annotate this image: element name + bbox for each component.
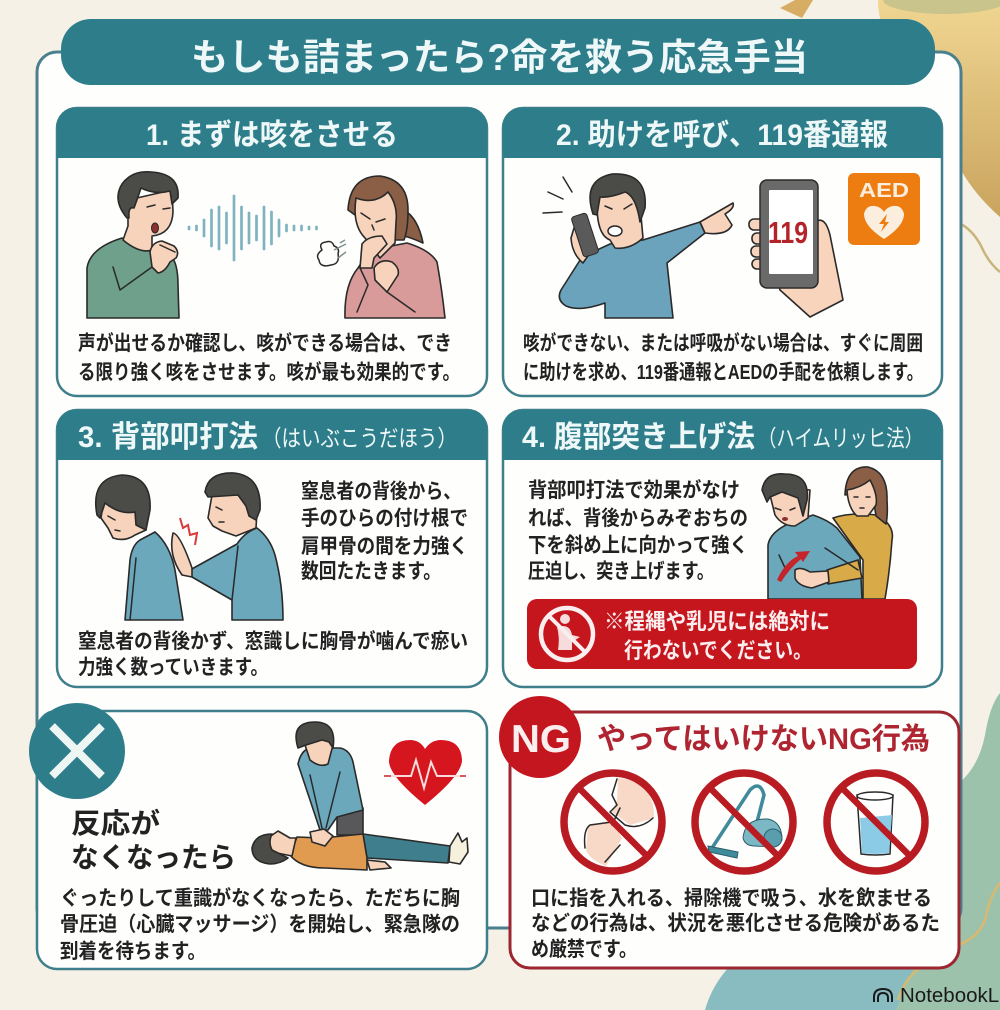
icon: no water [827,773,925,871]
NG badge [499,696,581,778]
warning box [527,599,917,669]
panel: step 1 cough [57,108,487,396]
unresponsive body text: ぐったりして重識がなくなったら、ただちに胸 [60,886,460,910]
step 4 text: 圧迫し、突き上げます。 [528,560,714,583]
step 4 heading [522,421,923,454]
step 2 body text [523,331,923,384]
unresponsive heading: なくなったら [71,842,236,873]
warning text: 行わないでください。 [624,638,812,663]
step 3 body text [78,629,468,679]
step 4 text [528,478,748,583]
background: olive ellipse [883,0,1000,14]
cough puff [318,240,346,266]
sound wave [189,196,316,260]
figure: rescuer doing compressions [296,722,363,835]
panel: unresponsive [29,703,487,969]
AED sign: AED [859,180,909,202]
unresponsive heading: 反応が [71,807,160,839]
background: green blob [880,693,1000,1010]
step 3 side text: 窒息者の背後から、 [301,479,461,503]
title text: もしも詰まったら?命を救う応急手当 [191,37,808,78]
background: gold blob [878,0,1000,217]
red upward arrow [777,551,810,582]
NG body text: などの行為は、状況を悪化させる危険があるた [531,911,940,935]
unresponsive body text: 骨圧迫（心臓マッサージ）を開始し、緊急隊の [60,913,460,936]
step 1 header band [57,108,487,158]
NG body text: め厳禁です。 [531,938,637,961]
background: blue blob [705,966,915,1010]
step 3 body text: 力強く数っていきます。 [78,656,268,679]
step 3 side text: 数回たたきます。 [301,560,441,583]
step 3 heading: 3. 背部叩打法 [78,421,258,454]
step 3 heading [78,421,457,454]
figure: man calling and pointing [543,174,733,318]
step 4 text: れば、背後からみぞおちの [528,507,748,530]
step 1 heading: 1. まずは咳をさせる [146,119,398,152]
step 3 heading: （はいぶこうだほう） [262,425,457,451]
figure: woman coughing [345,176,445,318]
119 number: 119 [768,215,808,250]
figure: man checking voice [87,172,179,318]
step 4 text: 下を斜め上に向かって強く [528,534,748,557]
icon: no vacuum [695,773,793,871]
panel: NG actions [499,696,959,968]
AED sign [848,173,920,245]
step 3 header band [57,410,487,460]
step 1 body text: る限り強く咳をさせます。咳が最も効果的です。 [78,360,460,384]
step 1 body text [78,331,460,384]
step 4 header band [503,410,942,460]
icon: heart with ECG [384,740,466,805]
icon: no infant [541,608,593,660]
step 2 heading: 2. 助けを呼び、119番通報 [556,119,888,152]
figure: choking person leaning [96,475,183,620]
panel: step 4 abdominal thrusts [503,410,942,687]
panel: step 2 call for help [503,108,942,396]
phone with 119 [749,180,843,317]
unresponsive body text [60,886,460,963]
background: gold wavy line [961,224,1000,272]
step 4 heading: （ハイムリッヒ法） [758,425,923,451]
figure: rescuer striking back [172,473,283,620]
panel: step 3 back blows [57,410,487,687]
warning text [604,609,830,663]
step 4 heading: 4. 腹部突き上げ法 [522,421,755,454]
step 3 side text: 手のひらの付け根で [301,507,468,530]
NG body text: 口に指を入れる、掃除機で吸う、水を飲ませる [531,887,932,910]
title banner [61,19,935,85]
NG badge: NG [511,718,571,761]
background: gold line lower [898,883,1000,1000]
NG body text [531,887,940,961]
icon: no finger in mouth [564,773,662,871]
figure: woman behind [833,467,892,599]
step 3 side text: 肩甲骨の間を力強く [301,535,468,558]
figure: choking man bent forward [762,474,862,599]
unresponsive body text: 到着を待ちます。 [60,940,206,963]
step 3 body text: 窒息者の背後かず、窓識しに胸骨が噛んで瘀い [78,629,468,653]
background: gold diamond [780,0,813,18]
icon: X circle [29,703,125,799]
step 1 body text: 声が出せるか確認し、咳ができる場合は、でき [78,331,452,355]
warning text: ※程縄や乳児には絶対に [604,609,830,634]
impact zigzag [180,518,197,545]
figure: patient lying [252,829,468,870]
NG heading: やってはいけないNG行為 [597,723,930,756]
step 3 side text [301,479,468,583]
step 4 text: 背部叩打法で効果がなけ [528,478,740,502]
unresponsive heading [71,807,236,873]
step 2 header band [503,108,942,158]
